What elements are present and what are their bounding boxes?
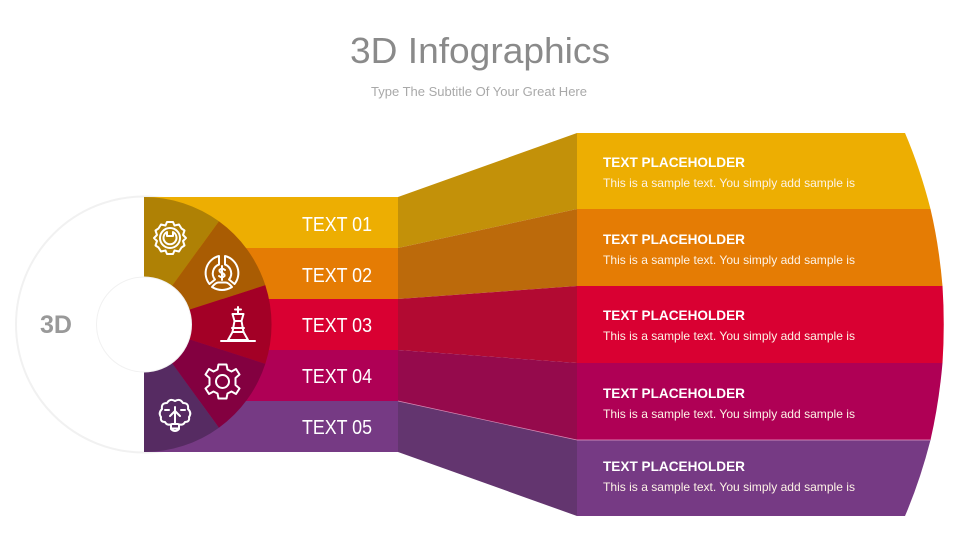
icon: gear	[206, 364, 240, 398]
row 4 text: TEXT PLACEHOLDER	[603, 385, 745, 401]
row 3 text: This is a sample text. You simply add sample is	[603, 329, 855, 343]
row 5 text: This is a sample text. You simply add sample is	[603, 480, 855, 494]
band labels: TEXT 05	[302, 417, 372, 439]
icon: brain bulb	[160, 400, 190, 431]
band labels: TEXT 04	[302, 366, 372, 388]
subtitle: Type The Subtitle Of Your Great Here	[371, 84, 587, 99]
row 1 text: This is a sample text. You simply add sample is	[603, 176, 855, 190]
left bands	[144, 197, 398, 452]
row 4 text	[603, 385, 855, 421]
row 1 text	[603, 154, 855, 190]
row 2 text: This is a sample text. You simply add sample is	[603, 253, 855, 267]
row 3 text	[603, 307, 855, 343]
row 5 text	[603, 458, 855, 494]
band labels: TEXT 01	[302, 214, 372, 236]
row 2 text	[603, 231, 855, 267]
funnel sides	[398, 133, 577, 516]
row 2 text: TEXT PLACEHOLDER	[603, 231, 745, 247]
wedges	[144, 197, 272, 452]
icon: chess king	[221, 307, 255, 341]
icon: dollar person pie	[206, 256, 238, 290]
label: 3D: 3D	[40, 311, 72, 339]
donut: white left half	[16, 196, 272, 452]
right bands	[398, 133, 944, 516]
band labels	[302, 214, 372, 439]
row 3 text: TEXT PLACEHOLDER	[603, 307, 745, 323]
title: 3D Infographics	[350, 30, 610, 71]
row 5 text: TEXT PLACEHOLDER	[603, 458, 745, 474]
inner circle	[96, 277, 192, 372]
row 4 text: This is a sample text. You simply add sample is	[603, 407, 855, 421]
band labels: TEXT 02	[302, 265, 372, 287]
band labels: TEXT 03	[302, 315, 372, 337]
row 1 text: TEXT PLACEHOLDER	[603, 154, 745, 170]
icon: gear with wrench	[154, 222, 186, 254]
